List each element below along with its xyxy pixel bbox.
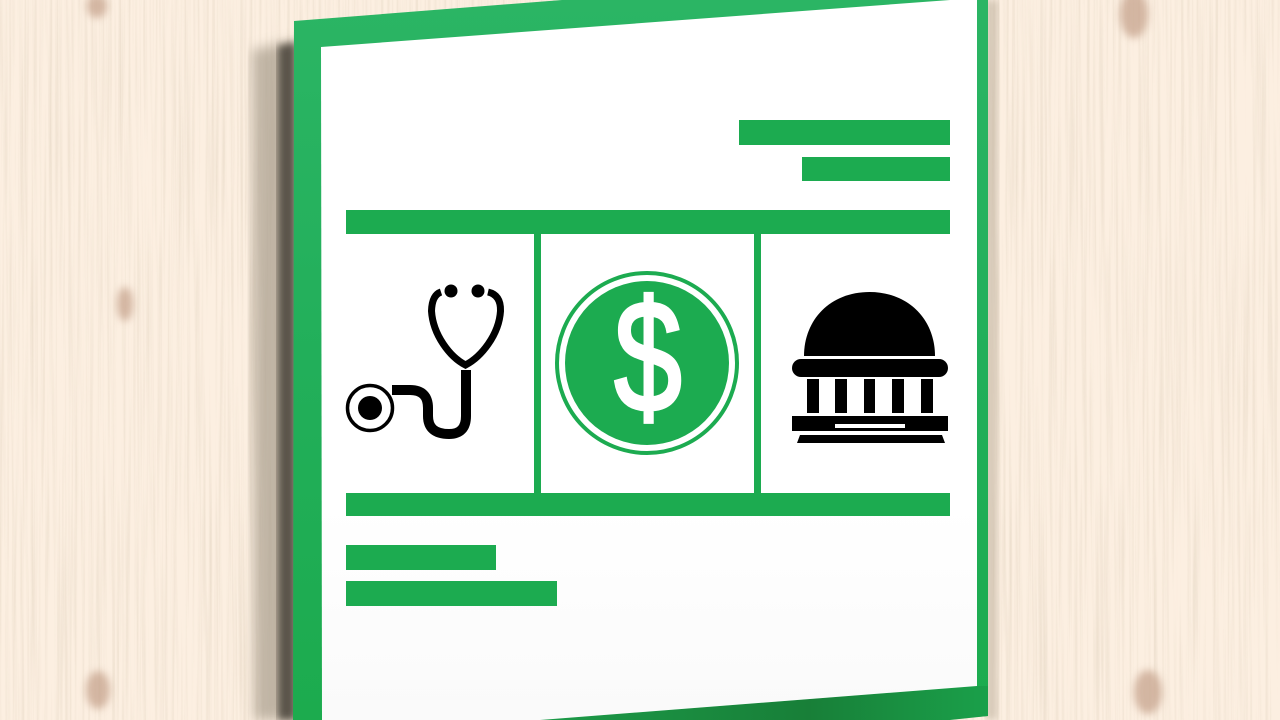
icon: dollar coin	[557, 267, 737, 453]
icon: domed government building	[792, 292, 948, 443]
card shadow	[252, 0, 998, 720]
icon: dollar coin: $	[614, 267, 682, 445]
bottom left bars	[346, 545, 557, 606]
card white paper	[321, 0, 977, 720]
card	[293, 0, 988, 720]
table frame	[346, 210, 950, 516]
card green frame	[293, 0, 988, 720]
icon: stethoscope	[348, 284, 501, 434]
top right bars	[739, 120, 950, 181]
